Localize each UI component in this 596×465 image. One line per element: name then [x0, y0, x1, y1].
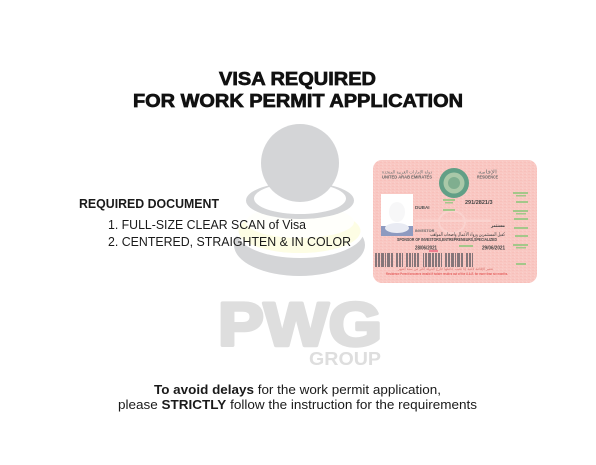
card header: Arabic residence: الإقامة [478, 170, 497, 176]
card header: Arabic country name: دولة الإمارات العربية المتحدة [382, 170, 432, 176]
heading: required document: REQUIRED DOCUMENT [79, 197, 219, 211]
list item 1: 1. FULL-SIZE CLEAR SCAN of Visa [108, 218, 306, 232]
logo: stacked rings and sphere [234, 124, 365, 276]
red Arabic notice line: تعتبر الإقامة لاغية إذا تغيب حاملها خارج الدولة أكثر من ستة أشهر [397, 266, 493, 272]
card number: 291/2821/3 [465, 200, 493, 206]
Arabic occupation: مستثمر [490, 223, 505, 229]
card header: residence: RESIDENCE [477, 174, 498, 180]
footer line 1: To avoid delays for the work permit application, [154, 383, 441, 397]
dates: 28/06/2021 [415, 246, 437, 252]
watermark: PWG Group logo [218, 124, 382, 369]
logo wordmark: GROUP: GROUP [309, 349, 381, 369]
sponsor text: SPONSOR OF INVESTORS,ENTREPRENEURS,SPECIALIZED [397, 237, 498, 242]
footer line 2: please STRICTLY follow the instruction for the requirements [118, 398, 477, 412]
required document text block [79, 197, 351, 249]
photo placeholder [381, 194, 413, 236]
footer note [118, 383, 477, 412]
card occupation label: INVESTOR [415, 229, 435, 233]
title: VISA REQUIRED [219, 69, 376, 89]
dates: 29/06/2021 [482, 246, 505, 252]
pale redaction band [415, 220, 491, 222]
title [133, 69, 463, 111]
visa residence card sample [373, 160, 537, 283]
card background [373, 160, 537, 283]
card header: country: UNITED ARAB EMIRATES [382, 174, 432, 180]
dates [415, 246, 505, 252]
watermark on card [439, 211, 465, 233]
barcode [375, 253, 473, 267]
Arabic sponsor text: كفيل المستثمرين ورواد الأعمال واصحاب المواهب [430, 231, 505, 238]
red notice line: Residence Permit becomes invalid if holder resides out of the U.A.E. for more than six months. [386, 271, 508, 276]
red date underline [429, 250, 438, 252]
green field labels [443, 192, 528, 265]
list item 2: 2. CENTERED, STRAIGHTEN & IN COLOR [108, 235, 351, 249]
logo wordmark: PWG: PWG [218, 290, 382, 358]
card location: DUBAI [415, 205, 430, 210]
title: FOR WORK PERMIT APPLICATION [133, 91, 463, 111]
icon: green seal [439, 168, 469, 198]
